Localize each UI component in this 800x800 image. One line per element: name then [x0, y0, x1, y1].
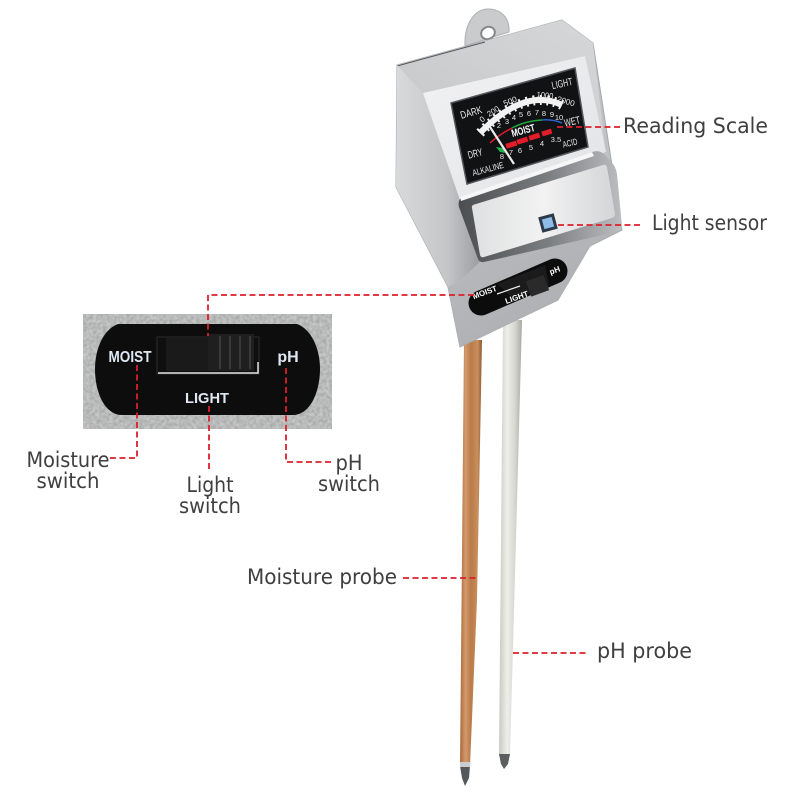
callout lines — [110, 127, 642, 653]
gauge labels: 3 — [505, 117, 509, 126]
pH probe — [499, 320, 522, 769]
gauge labels: 6 — [527, 109, 531, 118]
lower housing section — [448, 230, 622, 347]
gauge labels — [459, 76, 582, 178]
gauge labels: 1000 — [536, 90, 554, 101]
housing — [396, 20, 622, 347]
gauge labels: 500 — [502, 94, 519, 108]
light sensor hood — [459, 151, 622, 262]
slide switch — [157, 334, 259, 374]
switch inset photo: LIGHT — [185, 390, 229, 407]
gauge labels: 5 — [529, 143, 533, 152]
switch panel — [471, 264, 562, 306]
gauge labels: 4 — [540, 139, 544, 148]
label: moisture switch — [26, 448, 110, 493]
gauge labels: 4 — [512, 113, 516, 122]
gauge labels: 9 — [550, 110, 554, 119]
label: light switch: switch — [179, 494, 241, 518]
gauge labels: 2 — [497, 121, 501, 130]
gauge labels: 3.5 — [551, 135, 561, 144]
gauge labels: 7 — [509, 148, 513, 157]
left side facet — [396, 65, 480, 287]
light sensor — [538, 213, 558, 233]
label: reading scale: Reading Scale — [623, 114, 768, 138]
gauge labels: ALKALINE — [471, 160, 505, 178]
gauge labels: 6 — [518, 146, 522, 155]
label: pH switch: pH — [336, 451, 362, 475]
needle — [490, 127, 514, 164]
meter body — [396, 9, 622, 347]
label: pH switch: switch — [318, 472, 380, 496]
switch inset photo: pH — [277, 349, 299, 366]
label: pH switch — [318, 451, 380, 496]
label: pH probe: pH probe — [597, 639, 692, 663]
label: light sensor: Light sensor — [652, 211, 767, 235]
label: light switch: Light — [186, 473, 234, 497]
gauge labels: 8 — [542, 109, 546, 118]
switch panel: MOIST — [471, 284, 498, 301]
moisture and pH colour scale — [490, 120, 562, 143]
meter face plate — [423, 56, 606, 200]
gauge labels: 8 — [500, 152, 504, 161]
hanging tab — [465, 9, 509, 46]
gauge labels: 2000 — [556, 95, 576, 108]
gauge window — [451, 68, 588, 184]
switch panel: LIGHT — [504, 289, 530, 306]
switch panel: pH — [548, 264, 562, 277]
switch inset photo — [83, 314, 332, 429]
inset black panel — [95, 324, 320, 415]
white light scale — [480, 100, 562, 133]
gauge labels: 7 — [535, 108, 539, 117]
gauge labels: LIGHT — [551, 76, 574, 92]
gauge labels: DRY — [467, 146, 484, 162]
gauge labels: WET — [563, 114, 582, 130]
label: moisture probe: Moisture probe — [247, 565, 397, 589]
gauge labels: DARK — [459, 104, 484, 122]
gauge labels: 5 — [519, 110, 523, 119]
inset labels: MOIST — [108, 349, 152, 366]
gauge labels: 0 — [478, 114, 487, 124]
gauge labels: ACID — [562, 136, 579, 150]
label: moisture switch: Moisture — [26, 448, 110, 472]
gauge labels: MOIST — [510, 122, 537, 140]
label: moisture switch: switch — [36, 469, 100, 493]
housing top face — [397, 20, 606, 155]
moisture probe — [460, 340, 482, 786]
gauge labels: 200 — [485, 104, 502, 119]
red and green pH bars — [496, 129, 552, 153]
label: light switch — [179, 473, 241, 518]
gauge labels: 10 — [555, 113, 563, 122]
